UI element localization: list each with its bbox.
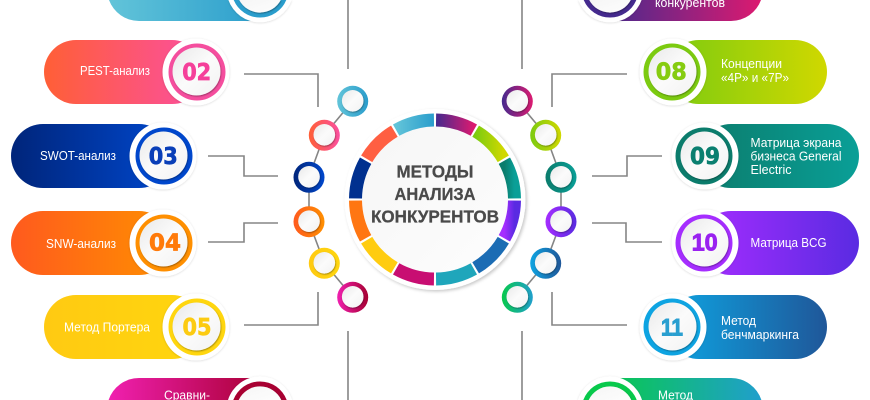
pill 07: конкурентов (578, 0, 761, 22)
pill 02: PEST-анализ: PEST-анализ (80, 64, 150, 78)
central hub (344, 109, 526, 290)
hub title: КОНКУРЕНТОВ (371, 206, 499, 226)
pill 08: Концепции 4P и 7P: 08 (656, 60, 687, 86)
pill 09: Матрица экрана бизнеса General Electric: бизнеса General (750, 150, 842, 164)
pill 09: Матрица экрана бизнеса General Electric: 09 (690, 144, 720, 170)
pill 05: Метод Портера (44, 294, 230, 360)
small rings right (502, 86, 576, 313)
pill 06: Сравни- (109, 376, 292, 400)
pill 03: SWOT-анализ: SWOT-анализ (40, 149, 116, 163)
small rings left (294, 86, 368, 313)
pill 05: Метод Портера: 05 (182, 315, 212, 341)
pill 08: Концепции 4P и 7P (640, 38, 827, 106)
pill 04: SNW-анализ (11, 210, 196, 276)
pill 11: Метод бенчмаркинга: Метод (721, 314, 757, 328)
pill 01 (109, 0, 292, 22)
pill 04: SNW-анализ: 04 (149, 230, 181, 256)
pill 09: Матрица экрана бизнеса General Electric: Матрица экрана (750, 136, 842, 150)
pill 02: PEST-анализ (44, 38, 230, 106)
pill 09: Матрица экрана бизнеса General Electric (672, 122, 859, 190)
pill 12: Метод (578, 376, 761, 400)
hub title: МЕТОДЫ (396, 162, 474, 182)
pill 03: SWOT-анализ: 03 (149, 144, 178, 170)
pill 02: PEST-анализ: 02 (182, 60, 211, 86)
hub title (371, 162, 499, 226)
hub title: АНАЛИЗА (394, 184, 476, 204)
pill 10: Матрица BCG: 10 (692, 230, 718, 256)
pill 11: Метод бенчмаркинга: бенчмаркинга (721, 328, 799, 342)
connector lines (208, 0, 662, 400)
pill 05: Метод Портера: Метод Портера (64, 320, 150, 334)
ring segments (356, 120, 514, 279)
pill 11: Метод бенчмаркинга (640, 294, 827, 360)
pill 10: Матрица BCG (672, 210, 859, 276)
pill 10: Матрица BCG: Матрица BCG (750, 236, 826, 250)
pill 08: Концепции 4P и 7P: Концепции (721, 57, 782, 71)
pill 09: Матрица экрана бизнеса General Electric: Electric (750, 163, 792, 177)
pill 11: Метод бенчмаркинга: 11 (661, 314, 683, 342)
pill 04: SNW-анализ: SNW-анализ (46, 237, 116, 251)
pill 03: SWOT-анализ (11, 122, 196, 190)
pill 08: Концепции 4P и 7P: «4P» и «7P» (721, 71, 789, 85)
